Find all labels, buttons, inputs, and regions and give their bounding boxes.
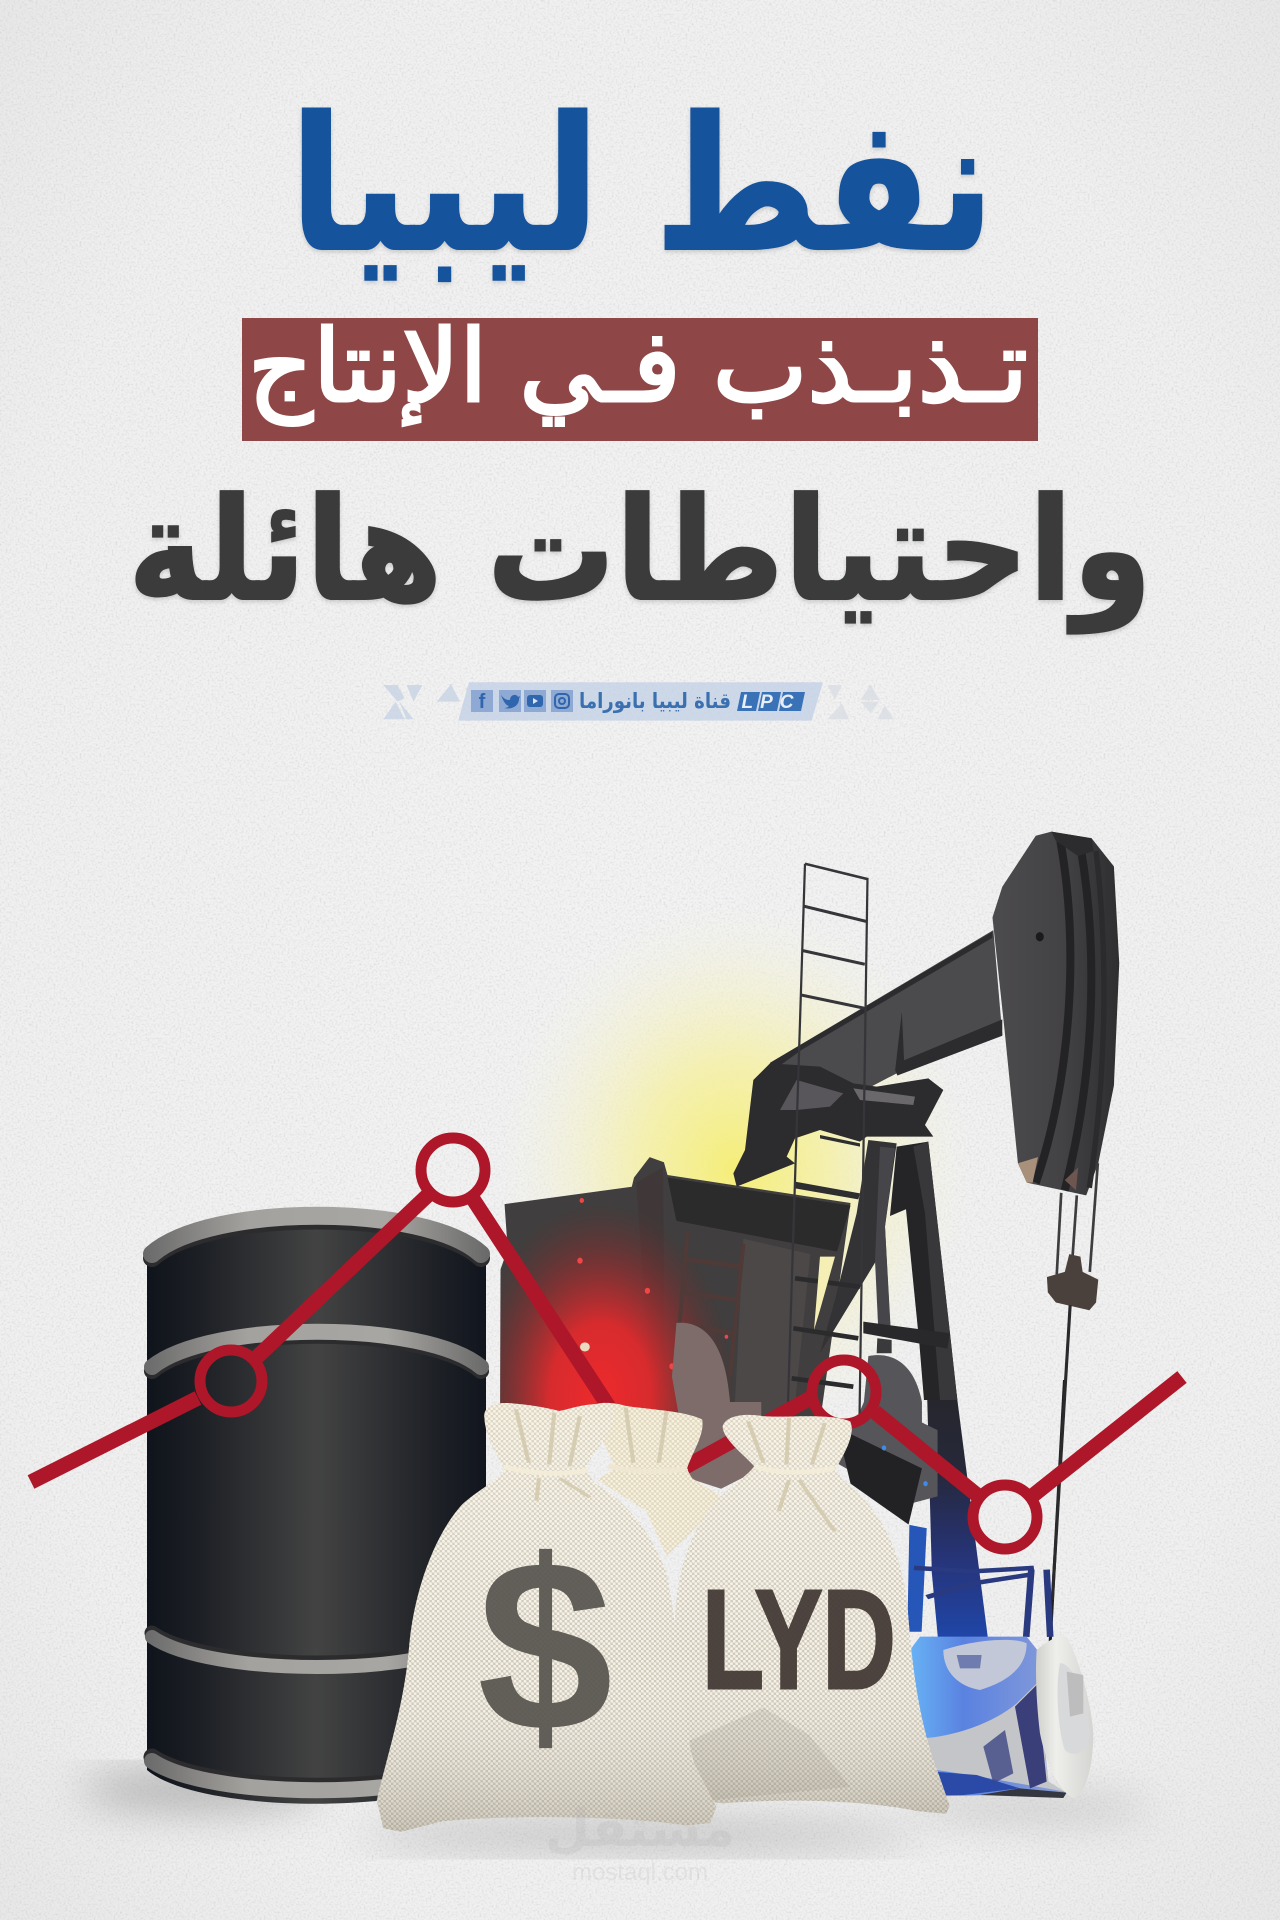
hanger and cables xyxy=(1047,1163,1098,1600)
gearbox left xyxy=(672,1323,761,1489)
gearbox and hanger xyxy=(788,864,1098,1600)
LYD label on bag: LYD xyxy=(702,1562,896,1719)
walking beam xyxy=(748,930,1002,1152)
ladder xyxy=(788,864,867,1422)
roll edge xyxy=(1036,1636,1093,1798)
title: Libya oil: نفط ليبيا xyxy=(290,77,994,293)
icon: youtube xyxy=(524,690,546,712)
red glow on tank xyxy=(500,1217,722,1413)
icon: facebook xyxy=(471,690,493,713)
LPC logo: LPC xyxy=(742,692,800,713)
icon: instagram xyxy=(551,690,573,712)
samson post left xyxy=(820,1140,897,1353)
barrel top rim xyxy=(152,1216,481,1258)
heading: huge reserves: واحتياطات هائلة xyxy=(128,468,1152,634)
watermark: مستقل xyxy=(545,1799,735,1859)
channel name: قناة ليبيا بانوراما xyxy=(579,689,731,713)
dollar bag xyxy=(377,1403,717,1832)
oil tank behind pump xyxy=(500,1157,850,1489)
LYD bag xyxy=(675,1415,950,1814)
bill ornament xyxy=(1015,1685,1047,1788)
barrel bottom rim xyxy=(152,1757,481,1790)
watermark: mostaql.com xyxy=(572,1859,708,1886)
yellow sun glow xyxy=(500,905,970,1435)
barrel ring upper xyxy=(152,1332,481,1371)
cross brace xyxy=(863,1322,950,1349)
right gearbox xyxy=(837,1355,938,1504)
pump saddle, samson post and legs xyxy=(733,1063,957,1400)
yellow opening bars xyxy=(795,1182,860,1199)
barrel ring lower xyxy=(152,1633,481,1667)
oil barrel xyxy=(147,1210,486,1804)
watermark xyxy=(545,1799,735,1886)
floor shadows xyxy=(80,1768,1150,1851)
channel logo strip xyxy=(383,682,894,721)
money bags xyxy=(377,1403,950,1832)
ladder rungs lower xyxy=(792,1278,860,1387)
icon: facebook: f xyxy=(479,691,486,713)
bill portrait xyxy=(943,1640,1027,1690)
dollar sign on bag: $ xyxy=(477,1509,613,1782)
red fluctuation line chart xyxy=(31,1138,1182,1549)
saddle platform xyxy=(733,1063,943,1187)
subtitle banner: production fluctuation: تـذبـذب فـي الإنتاج xyxy=(248,308,1028,426)
blue bill wrapped xyxy=(908,1637,1067,1796)
pumpjack xyxy=(748,832,1119,1195)
walking beam head xyxy=(992,832,1119,1195)
rear bag xyxy=(590,1403,723,1556)
samson post right xyxy=(890,1142,957,1400)
money roll xyxy=(908,1636,1093,1798)
blue lower frame of pump xyxy=(907,1380,1064,1642)
icon: twitter xyxy=(499,690,521,712)
sparks xyxy=(577,1198,728,1369)
